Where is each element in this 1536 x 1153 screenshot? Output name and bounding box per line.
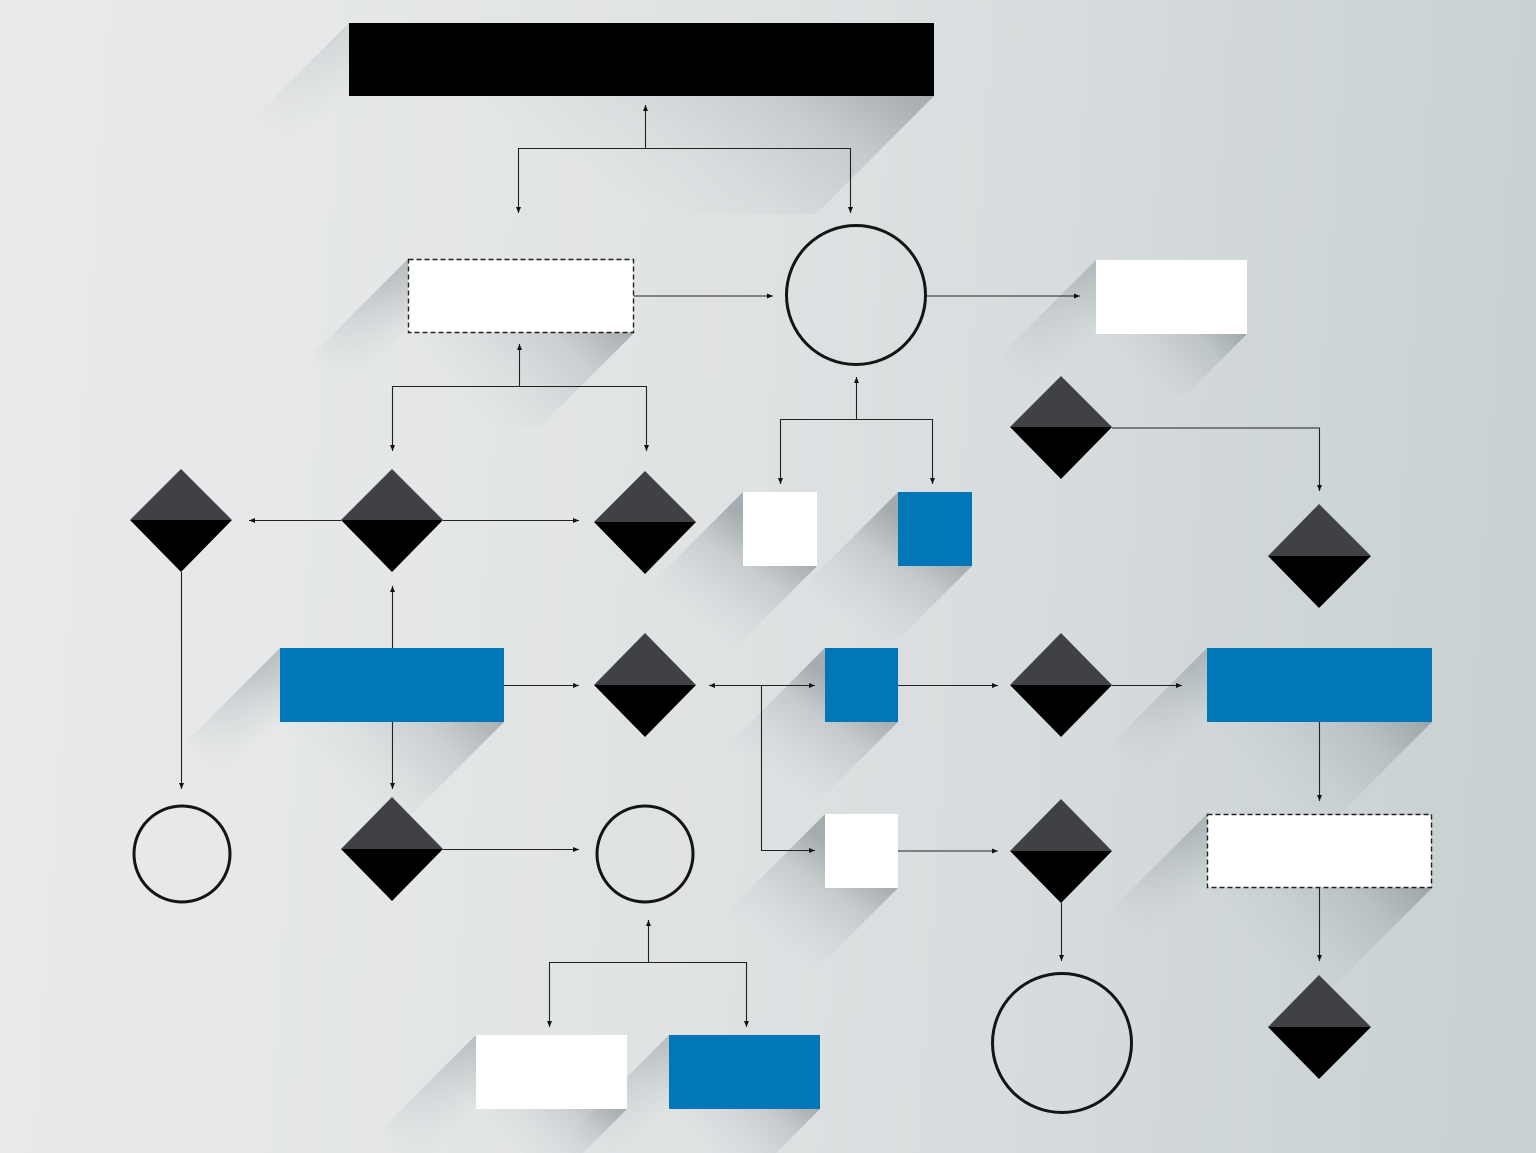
connector: middle diamond to left diamond: [249, 520, 341, 522]
box: blue left: [280, 648, 504, 722]
diamond: bottom right: [1268, 975, 1371, 1079]
connector: bottom boxes to circle: [550, 920, 746, 1027]
connector: dashed box to circle: [634, 295, 773, 297]
connector: blue box down to diamond: [392, 722, 394, 789]
connector: blue box up to diamond: [392, 586, 394, 648]
diamond: upper right: [1010, 376, 1112, 479]
diamond: center left: [341, 469, 443, 572]
connector: diamond to small circle: [443, 848, 579, 850]
long shadows: [185, 23, 1432, 1153]
square: blue: [898, 492, 972, 566]
circle: lower center: [597, 806, 693, 902]
box: black title bar: [349, 23, 934, 96]
connector: diamond to wide blue box: [1112, 684, 1182, 686]
square: white: [743, 492, 817, 566]
box: blue right: [1207, 648, 1432, 722]
connector: diamond to large circle: [1060, 903, 1062, 961]
circle: upper center: [786, 226, 926, 364]
box: dashed white lower right: [1208, 814, 1432, 888]
diamond: middle right: [1010, 633, 1112, 737]
connector: squares to circle: [780, 377, 932, 484]
diamond: lower left: [341, 797, 443, 901]
diamond: middle: [594, 633, 696, 737]
connector: left diamond to circle: [180, 572, 182, 789]
box: white bottom: [476, 1035, 627, 1109]
connector: blue square to diamond: [898, 684, 998, 686]
square: white lower: [825, 814, 898, 888]
diamond: center: [594, 471, 696, 574]
connector: circle to white box: [926, 295, 1080, 297]
diamond: lower right: [1010, 799, 1112, 903]
box: dashed white upper: [408, 260, 634, 332]
diamond: left: [130, 469, 232, 572]
connector: dashed box to diamond: [1318, 888, 1320, 961]
circle: lower left: [134, 806, 230, 902]
connector: diamonds to dashed box: [392, 344, 646, 451]
connector: top box to branches: [518, 105, 850, 213]
connector: white square to diamond: [898, 850, 998, 852]
connector: center diamond to squares: [709, 686, 815, 850]
connector: wide blue box to dashed box: [1318, 722, 1320, 801]
circle: bottom large: [992, 974, 1132, 1112]
box: blue bottom: [669, 1035, 820, 1109]
connector: blue box to center diamond: [504, 684, 579, 686]
box: white upper right: [1096, 260, 1247, 334]
connector: middle diamond to right diamond: [443, 520, 579, 522]
connector: upper right diamonds: [1112, 428, 1320, 491]
square: blue middle: [825, 648, 898, 722]
diamond: right: [1268, 504, 1371, 608]
